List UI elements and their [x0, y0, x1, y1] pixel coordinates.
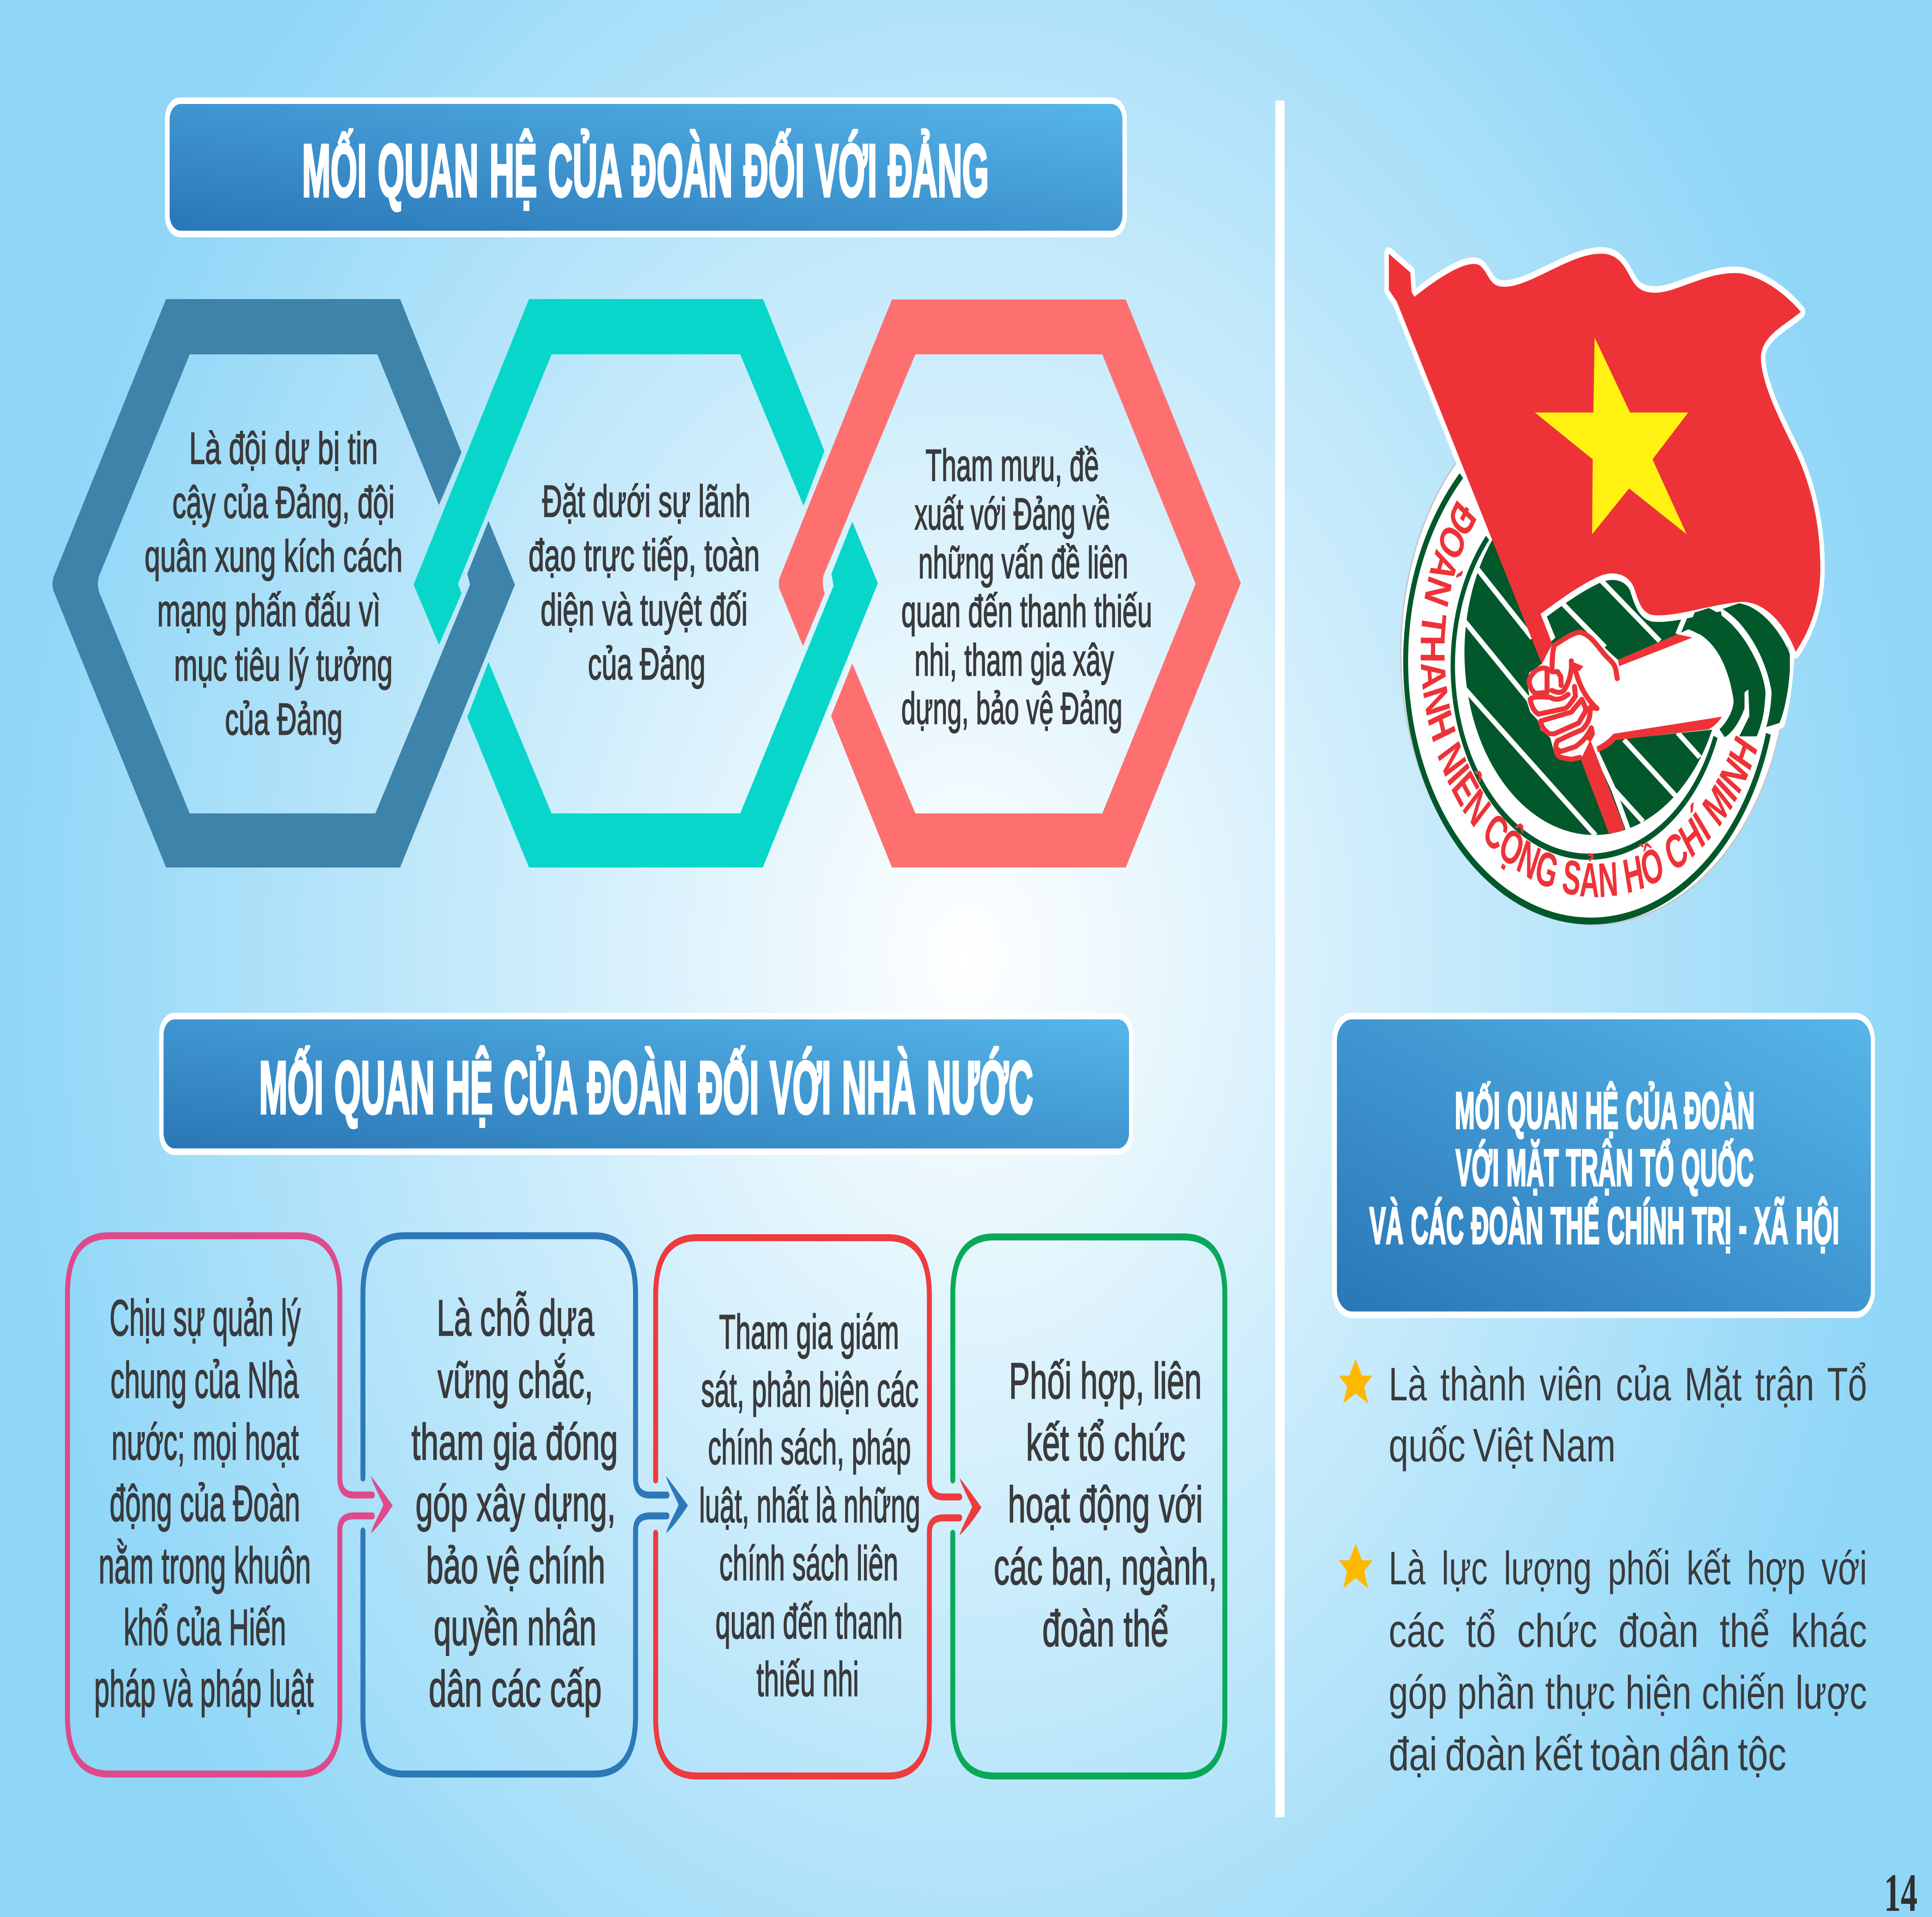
text: box 2: Là chỗ dựa	[437, 1289, 594, 1347]
emblem: sleeve and arm	[1527, 603, 1795, 760]
bullet: star two	[1339, 1544, 1372, 1588]
text: hexagon 2	[529, 476, 760, 689]
text: box 1: Chịu sự quản lý	[110, 1289, 301, 1347]
emblem: white badge	[1401, 381, 1788, 924]
text: box 3: quan đến thanh	[715, 1595, 903, 1648]
text: bullet two: góp phần thực hiện chiến lược	[1389, 1667, 1867, 1719]
text: box 3: Tham gia giám	[719, 1305, 899, 1359]
text: box 3: chính sách liên	[719, 1536, 898, 1590]
text: box 2: tham gia đóng	[412, 1414, 618, 1471]
bullet: star one	[1339, 1359, 1372, 1403]
emblem: circular text: ĐOÀN THANH NIÊN CỘNG SẢN HỒ CHÍ MINH	[1413, 492, 1765, 908]
emblem: outer green ring	[1406, 476, 1769, 921]
text: hexagon 2: diện và tuyệt đối	[541, 585, 748, 635]
text: hexagon 3: những vấn đề liên	[918, 538, 1128, 588]
text: hexagon 1: quân xung kích cách	[145, 531, 403, 581]
text: box 2: góp xây dựng,	[415, 1475, 616, 1532]
panel: heading Fatherland Front: VỚI MẶT TRẬN TỔ QUỐC	[1456, 1139, 1754, 1197]
text: hexagon 1: Là đội dự bị tin	[189, 424, 378, 473]
text: box 1: chung của Nhà	[111, 1352, 299, 1409]
text: box 4	[994, 1352, 1217, 1657]
text: box 4: đoàn thể	[1042, 1600, 1169, 1657]
text: box 2: bảo vệ chính	[426, 1537, 605, 1594]
text: box 1	[94, 1289, 314, 1718]
hexagon: teal	[413, 299, 878, 867]
text: box 1: pháp và pháp luật	[94, 1660, 314, 1718]
text: hexagon 3: nhi, tham gia xây	[915, 635, 1114, 685]
panel: interlocked hexagons	[53, 299, 1241, 867]
icon: Youth Union emblem	[1389, 253, 1820, 924]
heading: relationship with the State	[159, 1013, 1133, 1155]
text: box 4: kết tổ chức	[1026, 1414, 1185, 1471]
text: box 4: hoạt động với	[1008, 1476, 1203, 1533]
text: bullet one: quốc Việt Nam	[1389, 1419, 1616, 1471]
emblem: green disc with stripes	[1464, 540, 1722, 835]
text: hexagon 2: Đặt dưới sự lãnh	[542, 476, 750, 526]
panel: box 1 pink	[68, 1236, 393, 1774]
text: box 2: quyền nhân	[434, 1599, 597, 1656]
heading: relationship with the Party	[165, 97, 1127, 237]
heading: relationship with the Party: MỐI QUAN HỆ CỦA ĐOÀN ĐỐI VỚI ĐẢNG	[302, 129, 989, 212]
text: box 4: các ban, ngành,	[994, 1538, 1217, 1596]
text: hexagon 1: mạng phấn đấu vì	[157, 586, 381, 636]
arrow: pink	[371, 1476, 393, 1533]
text: bullet two	[1389, 1542, 1867, 1780]
text: hexagon 3: dựng, bảo vệ Đảng	[901, 684, 1122, 733]
text: hexagon 2: của Đảng	[588, 639, 706, 689]
text: hexagon 3: Tham mưu, đề	[925, 441, 1099, 490]
text: bullet one	[1389, 1358, 1867, 1471]
text: bullet two: Là lực lượng phối kết hợp với	[1389, 1542, 1867, 1594]
text: box 3	[699, 1305, 920, 1706]
panel: box 4 green	[953, 1237, 1225, 1776]
heading: relationship with the State: MỐI QUAN HỆ CỦA ĐOÀN ĐỐI VỚI NHÀ NƯỚC	[259, 1046, 1033, 1129]
text: box 1: động của Đoàn	[110, 1475, 300, 1532]
arrow: blue	[666, 1476, 688, 1533]
panel: heading Fatherland Front: MỐI QUAN HỆ CỦA ĐOÀN	[1455, 1082, 1755, 1140]
panel: box 2 blue	[363, 1236, 688, 1774]
text: box 4: Phối hợp, liên	[1009, 1352, 1202, 1410]
text: hexagon 3	[901, 441, 1152, 733]
text: box 2	[412, 1289, 618, 1718]
arrow: red	[960, 1478, 981, 1535]
emblem: red flag	[1389, 253, 1820, 664]
emblem: yellow star	[1535, 338, 1688, 534]
emblem: flag white outline	[1389, 253, 1820, 652]
text: box 1: khổ của Hiến	[124, 1599, 286, 1656]
text: hexagon 1	[145, 424, 403, 744]
text: hexagon 3: quan đến thanh thiếu	[901, 587, 1152, 636]
text: hexagon 1: của Đảng	[225, 694, 343, 744]
text: bullet one: Là thành viên của Mặt trận Tổ	[1389, 1358, 1867, 1410]
emblem: fist and pole	[1529, 632, 1722, 834]
text: bullet two: các tổ chức đoàn thể khác	[1389, 1605, 1867, 1657]
text: box 3: chính sách, pháp	[708, 1420, 911, 1474]
text: hexagon 2: đạo trực tiếp, toàn	[529, 531, 760, 580]
text: box 1: nước; mọi hoạt	[112, 1414, 299, 1471]
emblem: inner green ring	[1453, 538, 1716, 857]
text: box 3: luật, nhất là những	[699, 1478, 920, 1532]
text: bullet two: đại đoàn kết toàn dân tộc	[1389, 1728, 1786, 1780]
hexagon: dark blue	[53, 299, 515, 867]
text: hexagon 1: mục tiêu lý tưởng	[174, 640, 393, 690]
text: hexagon 3: xuất với Đảng về	[915, 489, 1110, 539]
text: box 1: nằm trong khuôn	[99, 1537, 311, 1594]
text: box 3: thiếu nhi	[757, 1652, 859, 1706]
text: hexagon 1: cậy của Đảng, đội	[172, 478, 395, 527]
text: box 2: dân các cấp	[429, 1660, 602, 1718]
hexagon: coral	[779, 299, 1241, 867]
text: box 3: sát, phản biện các	[701, 1363, 918, 1417]
panel: heading Fatherland Front	[1332, 1013, 1875, 1318]
text: box 2: vững chắc,	[437, 1352, 593, 1409]
panel: box 3 red	[656, 1238, 981, 1776]
